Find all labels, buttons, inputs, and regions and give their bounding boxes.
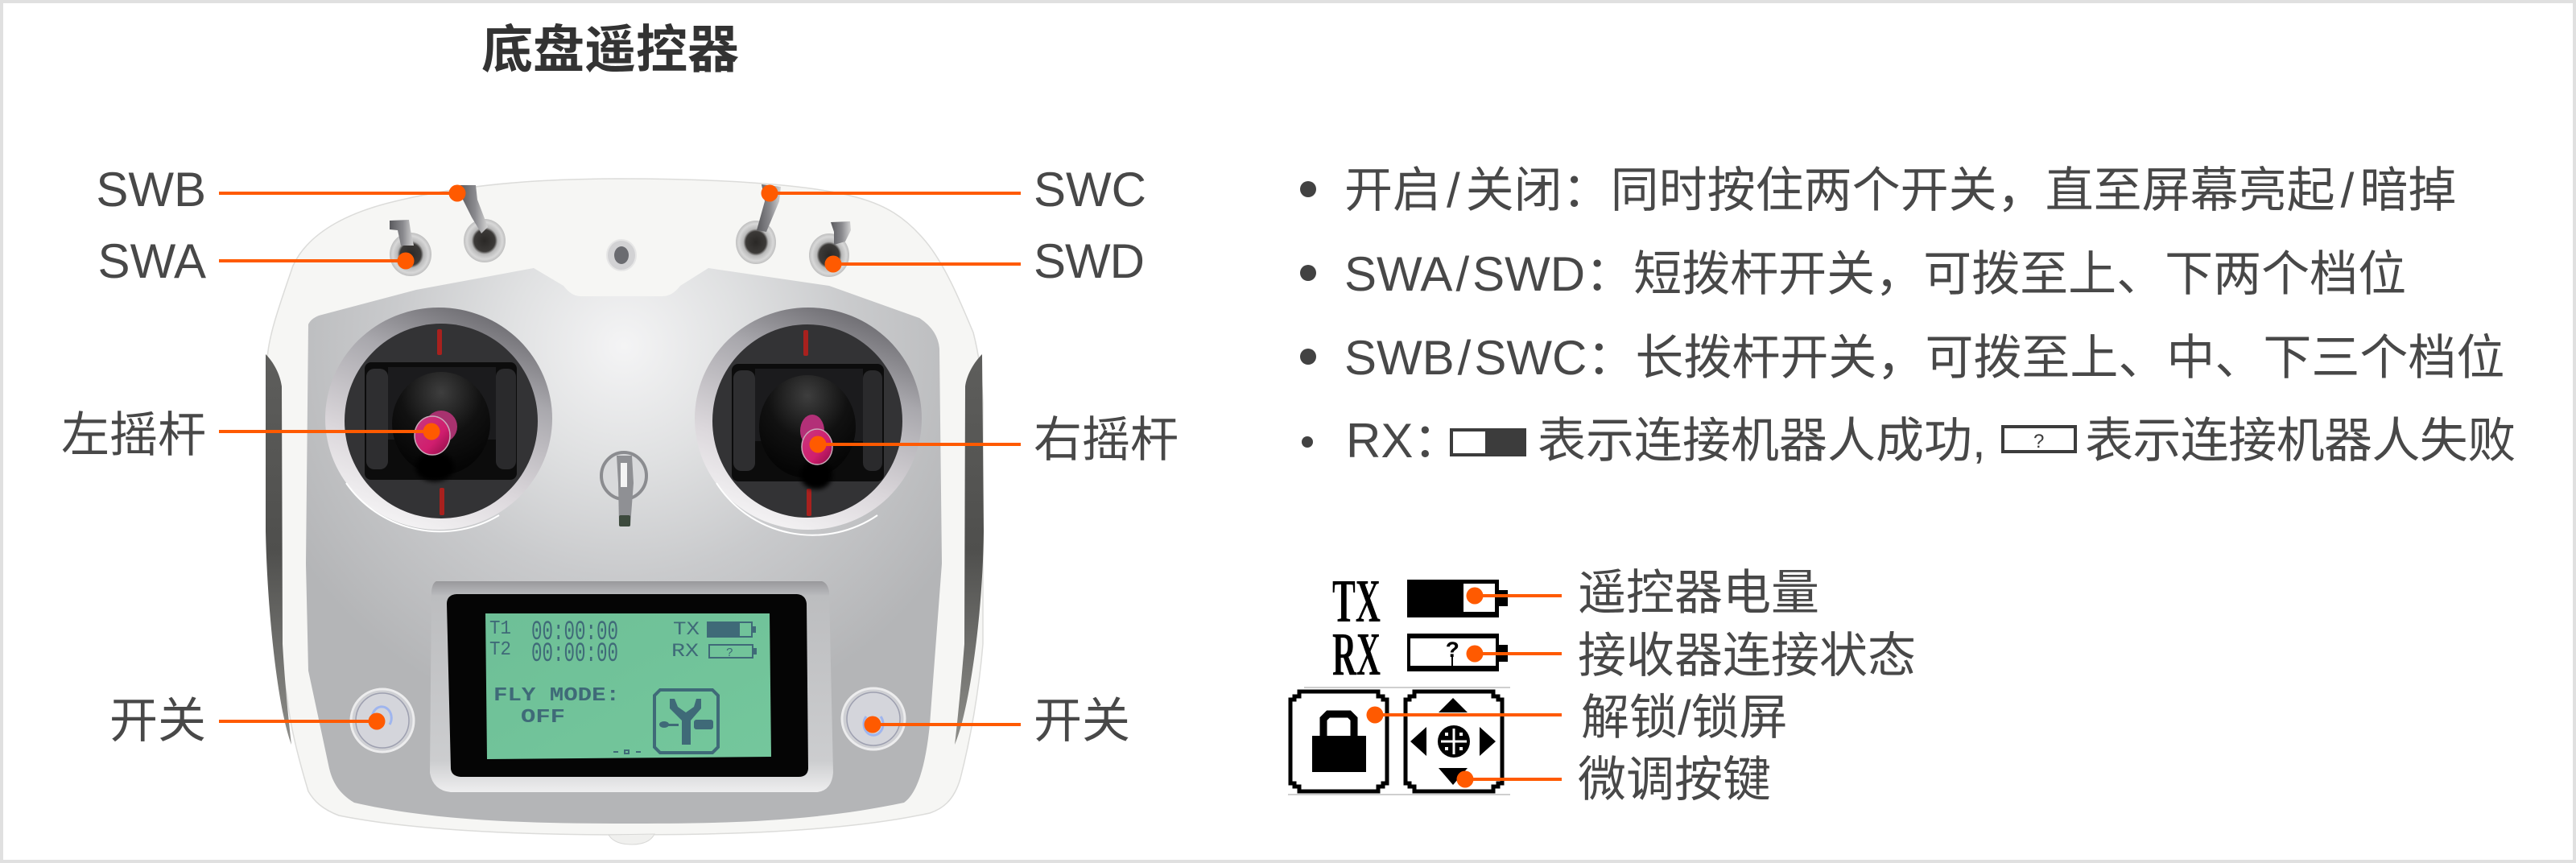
callout: SWA bbox=[98, 234, 414, 288]
grey rule top bbox=[1304, 687, 1510, 688]
LCD screen bbox=[485, 613, 771, 759]
TX battery icon: TX bbox=[1332, 568, 1381, 635]
callout: SWC bbox=[762, 163, 1146, 217]
callout: SWC: SWC bbox=[1034, 163, 1146, 217]
centre mount nut bbox=[607, 240, 636, 270]
callout: receiver status: 接收器连接状态 bbox=[1578, 629, 1916, 683]
item: RX status: RX： bbox=[1346, 414, 1461, 468]
T2 timer: T2 bbox=[489, 639, 511, 661]
gimbal dome bbox=[392, 372, 490, 475]
gimbal block bbox=[732, 364, 884, 481]
gimbal block bbox=[365, 362, 517, 480]
callout: lock bbox=[1367, 691, 1788, 745]
callout: right power switch: 开关 bbox=[1034, 694, 1130, 748]
RX battery icon: ? bbox=[1446, 639, 1459, 664]
item: short switches: SWA/SWD：短拨杆开关，可拨至上、下两个档位 bbox=[1344, 247, 2406, 301]
item: long switches: SWB/SWC：长拨杆开关，可拨至上、中、下三个档位 bbox=[1344, 331, 2504, 385]
item: RX status bbox=[1302, 414, 2516, 468]
page dots bbox=[613, 750, 641, 754]
T1 timer: T1 bbox=[489, 618, 511, 640]
switch SWB bbox=[460, 185, 506, 262]
T1 timer bbox=[489, 617, 618, 648]
RX battery icon: RX bbox=[1332, 621, 1381, 688]
switch SWD bbox=[809, 221, 851, 277]
remote controller photo bbox=[266, 179, 984, 844]
red bottom tick bbox=[807, 489, 811, 516]
callout: transmitter battery: 遥控器电量 bbox=[1578, 566, 1819, 620]
centre switch bbox=[601, 452, 646, 526]
grey rule bottom bbox=[1288, 794, 1510, 795]
trim keys icon bbox=[1406, 692, 1502, 791]
switch SWA bbox=[390, 220, 431, 276]
item: RX status: 表示连接机器人成功, bbox=[1538, 414, 1986, 468]
title: 底盘遥控器 bbox=[481, 21, 739, 79]
LCD bezel bbox=[447, 594, 808, 777]
fly mode text: FLY MODE: bbox=[493, 685, 620, 707]
callout: lock: 解锁/锁屏 bbox=[1581, 691, 1788, 745]
gimbal dome bbox=[759, 375, 856, 478]
gimbal ring bbox=[695, 308, 922, 530]
TX battery bbox=[673, 619, 756, 640]
callout: left stick bbox=[61, 408, 440, 462]
status icons legend bbox=[1288, 566, 1916, 807]
callout: SWD bbox=[824, 234, 1144, 288]
icon: RX disconnected: ? bbox=[2033, 431, 2044, 452]
icon: RX disconnected bbox=[2003, 427, 2075, 452]
controller shell bbox=[267, 179, 983, 835]
screen recess bbox=[430, 581, 833, 792]
callout: SWD: SWD bbox=[1034, 234, 1144, 288]
callout: trim keys: 微调按键 bbox=[1578, 753, 1771, 807]
left power button bbox=[351, 689, 414, 752]
item: power: 开启/关闭：同时按住两个开关，直至屏幕亮起/暗掉 bbox=[1344, 163, 2456, 217]
tool icon bbox=[654, 690, 718, 753]
left joystick bbox=[325, 308, 552, 531]
callout: SWB: SWB bbox=[96, 163, 206, 217]
TX battery: TX bbox=[673, 619, 700, 640]
icon: RX connected bbox=[1451, 428, 1526, 456]
gimbal ring bbox=[325, 308, 552, 530]
T1 timer: 00:00:00 bbox=[531, 617, 618, 648]
lock button icon bbox=[1290, 692, 1387, 791]
red bottom tick bbox=[440, 488, 444, 515]
callout: left stick: 左摇杆 bbox=[61, 408, 206, 462]
dark well bbox=[345, 324, 538, 518]
red top tick bbox=[803, 330, 808, 356]
stick shadow bbox=[415, 452, 454, 481]
stick knob bbox=[415, 411, 457, 455]
RX battery: ? bbox=[726, 646, 733, 660]
callout: right power switch bbox=[865, 694, 1130, 748]
T2 timer bbox=[489, 639, 618, 670]
callout: trim keys bbox=[1457, 753, 1771, 807]
switch SWC bbox=[736, 184, 781, 264]
fly mode value: OFF bbox=[521, 707, 565, 729]
item: RX status: 表示连接机器人失败 bbox=[2085, 414, 2516, 468]
RX battery icon bbox=[1332, 621, 1508, 688]
bottom nub bbox=[609, 834, 654, 844]
right grip bbox=[955, 354, 984, 745]
stick knob bbox=[800, 415, 832, 465]
stick shadow bbox=[800, 460, 832, 489]
silver faceplate bbox=[306, 268, 942, 824]
red top tick bbox=[437, 329, 442, 355]
right power button bbox=[842, 688, 905, 749]
T2 timer: 00:00:00 bbox=[531, 639, 618, 670]
dark well bbox=[712, 324, 902, 518]
TX battery icon bbox=[1332, 568, 1508, 635]
RX battery bbox=[671, 641, 757, 662]
callout: left power switch bbox=[109, 694, 385, 748]
callout: SWB bbox=[96, 163, 465, 217]
right joystick bbox=[695, 308, 922, 535]
left grip bbox=[266, 354, 291, 745]
callout: right stick: 右摇杆 bbox=[1034, 413, 1179, 467]
callout: right stick bbox=[810, 413, 1179, 467]
callout: SWA: SWA bbox=[98, 234, 206, 288]
callout: transmitter battery bbox=[1467, 566, 1819, 620]
instructions list bbox=[1300, 163, 2516, 468]
RX battery: RX bbox=[671, 641, 699, 662]
callout: left power switch: 开关 bbox=[109, 694, 206, 748]
